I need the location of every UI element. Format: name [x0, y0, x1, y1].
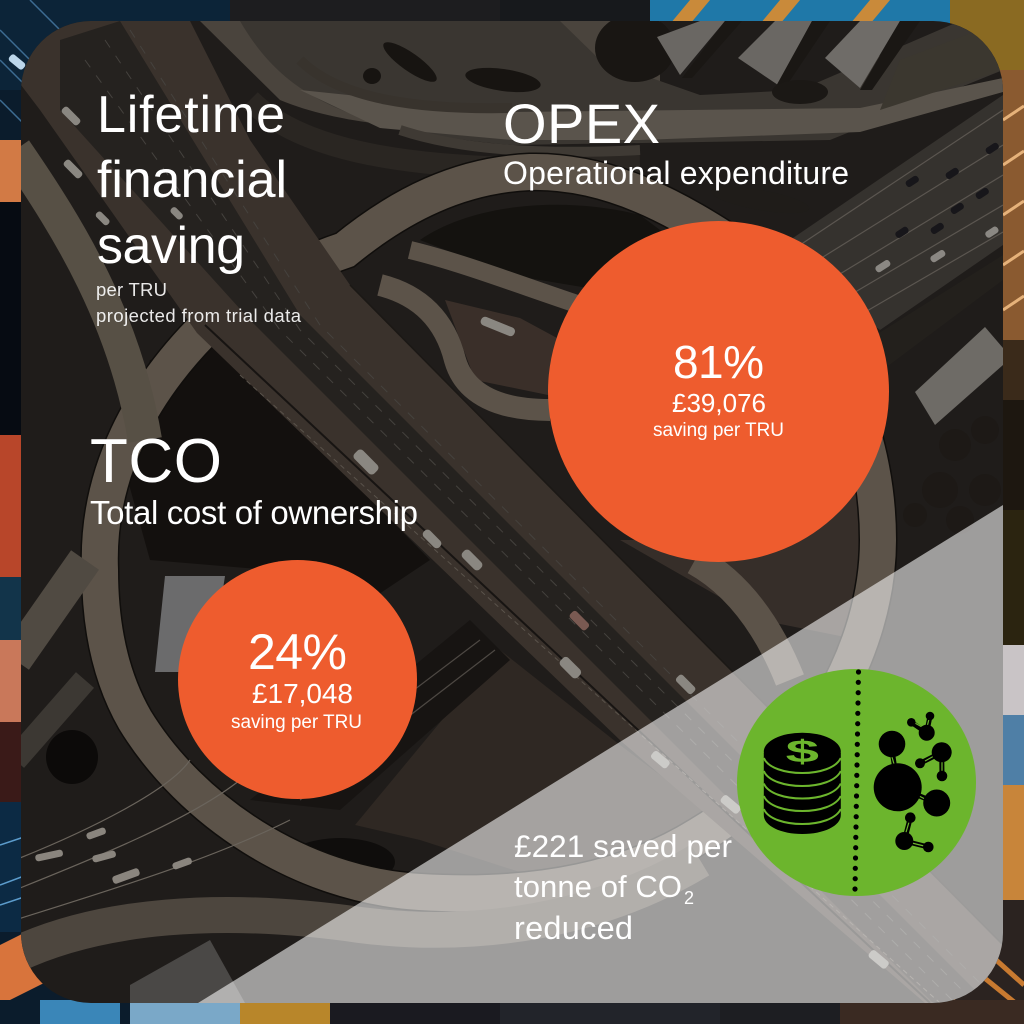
heading: TCO: TCO [90, 427, 222, 496]
right hand motorway [790, 95, 1003, 330]
grey roof right [915, 327, 1003, 425]
icon: coin stack [764, 733, 841, 834]
trees right [903, 416, 1001, 534]
caption: saving per TRU [653, 420, 784, 441]
inner right ramp [695, 560, 790, 680]
icon: molecules [874, 712, 952, 852]
text block: heading note [96, 279, 302, 326]
caption: saving per TRU [231, 712, 362, 733]
stat circle: OPEX saving [548, 221, 889, 562]
upper road area [200, 21, 660, 130]
heading: lifetime financial saving: Lifetime [97, 86, 285, 144]
translucent white triangle [198, 505, 1003, 1003]
mid ramps [380, 285, 550, 410]
text block: saving per tonne of CO2: £221 saved per [514, 828, 732, 864]
icon: green circle with coins and molecules [737, 669, 976, 896]
stat: 17,048 pounds: £17,048 [252, 678, 353, 709]
stat circle: TCO saving [178, 560, 417, 799]
large circular ramp [100, 172, 878, 893]
left ramps [15, 150, 145, 440]
dark pockets inside the ramps [420, 205, 661, 287]
text block: saving per tonne of CO2: 2 [684, 888, 694, 908]
stat: 24 percent: 24% [248, 624, 347, 680]
heading: TCO: Total cost of ownership [90, 494, 418, 531]
cars on highway [60, 105, 890, 970]
top buildings [657, 21, 725, 75]
heading: TCO [90, 427, 418, 531]
text block: saving per tonne of CO2 [514, 828, 732, 946]
heading: lifetime financial saving: financial [97, 151, 287, 209]
text block: saving per tonne of CO2: reduced [514, 910, 633, 946]
heading: lifetime financial saving: saving [97, 217, 245, 275]
lower dark lanes [250, 620, 510, 810]
heading: lifetime financial saving [97, 86, 287, 275]
grey building lower left [155, 576, 225, 672]
icon: coin stack: $ [786, 734, 819, 769]
stat: 81 percent: 81% [673, 336, 764, 388]
text block: heading note: per TRU [96, 279, 167, 300]
stat: 39,076 pounds: £39,076 [672, 388, 766, 418]
divider: dotted line [852, 669, 861, 892]
text block: saving per tonne of CO2: tonne of CO [514, 869, 682, 904]
heading: OPEX: OPEX [503, 92, 660, 155]
lower left lanes [15, 760, 290, 920]
heading: OPEX: Operational expenditure [503, 155, 849, 191]
bottom building [130, 940, 245, 1003]
text block: heading note: projected from trial data [96, 305, 302, 326]
heading: OPEX [503, 92, 849, 191]
